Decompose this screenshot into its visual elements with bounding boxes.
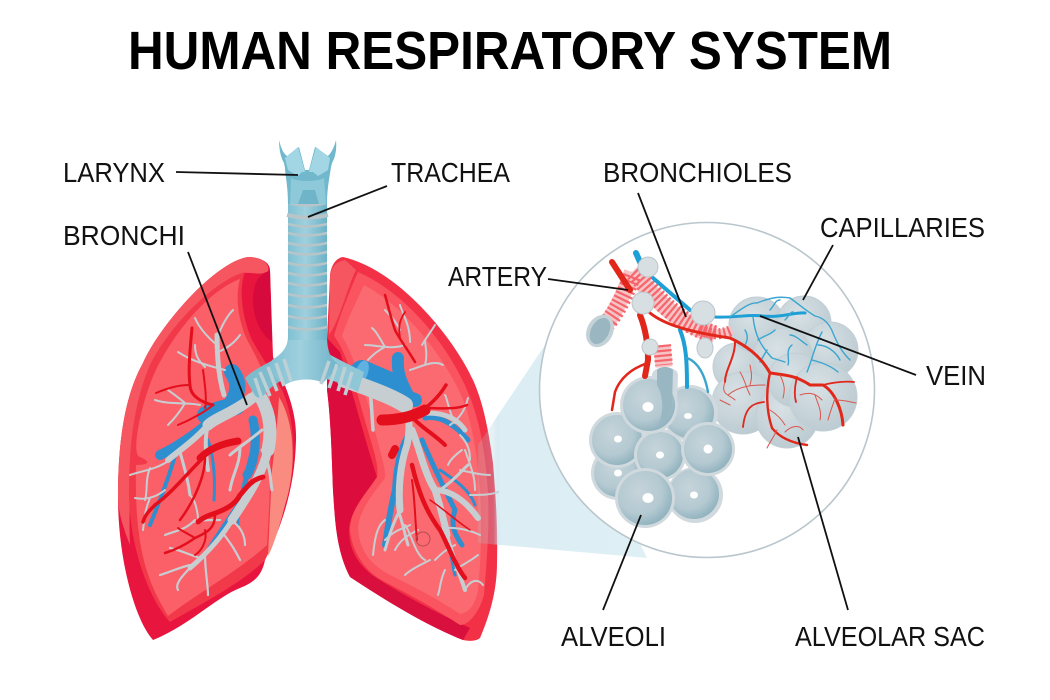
alveolus — [589, 412, 645, 468]
label: artery — [448, 261, 628, 292]
grey airways right — [345, 305, 498, 595]
alveolus — [634, 429, 686, 481]
bronchiole open end — [581, 310, 619, 352]
larynx — [279, 140, 336, 204]
alveolus — [662, 385, 718, 441]
trachea and larynx — [245, 140, 364, 399]
artery — [612, 262, 854, 445]
label: alveolar sac — [795, 437, 985, 652]
arteries right — [382, 295, 470, 578]
alveolus — [667, 467, 723, 523]
label: bronchioles — [603, 157, 792, 317]
vein capillaries — [687, 297, 850, 392]
alveolus — [615, 468, 675, 528]
label: larynx — [63, 157, 298, 188]
bronchial tree left lung — [130, 310, 272, 595]
zoom beam — [478, 345, 647, 558]
label: artery: ARTERY — [448, 261, 547, 292]
label: alveoli — [561, 515, 666, 652]
label: trachea — [308, 157, 510, 217]
blood vessels in zoom — [612, 253, 856, 448]
windpipe — [288, 195, 327, 340]
junction nodes — [632, 257, 715, 358]
alveolus — [681, 422, 735, 476]
left lung — [118, 257, 296, 640]
label: vein: VEIN — [926, 360, 986, 391]
bronchiole lumen — [585, 314, 615, 348]
pulmonary vessel blue right — [362, 358, 475, 575]
label: larynx: LARYNX — [63, 157, 165, 188]
cartilage rings — [287, 203, 328, 330]
label: alveolar sac: ALVEOLAR SAC — [795, 621, 985, 652]
small nodule — [416, 532, 430, 546]
grey airways left — [130, 310, 272, 595]
bronchus left — [245, 350, 303, 398]
bronchus right — [316, 350, 364, 392]
alveolus with stem — [620, 367, 678, 434]
bronchiole base — [600, 272, 732, 367]
alveoli cluster — [589, 367, 735, 528]
right lung — [327, 257, 497, 641]
alveolar sac — [712, 296, 858, 448]
label: capillaries — [803, 212, 985, 300]
label: bronchi — [63, 220, 247, 405]
pulmonary vessel blue left — [150, 372, 255, 548]
left bronchus rings — [255, 359, 291, 399]
alveolus — [591, 446, 645, 500]
label: capillaries: CAPILLARIES — [820, 212, 985, 243]
vein — [636, 253, 805, 387]
blue tube end — [353, 359, 371, 385]
capillary mesh — [603, 272, 732, 365]
label: trachea: TRACHEA — [391, 157, 510, 188]
label: bronchioles: BRONCHIOLES — [603, 157, 792, 188]
trachea fork — [268, 335, 340, 385]
bronchial tree right lung — [345, 295, 498, 595]
label: vein — [760, 316, 986, 391]
magnifier circle — [540, 222, 874, 558]
label: bronchi: BRONCHI — [63, 220, 185, 251]
label: alveoli: ALVEOLI — [561, 621, 666, 652]
bronchioles with capillary mesh — [581, 272, 732, 367]
artery capillaries — [720, 365, 856, 448]
arteries left — [143, 328, 263, 555]
right bronchus rings — [321, 361, 352, 395]
title: HUMAN RESPIRATORY SYSTEM — [128, 21, 892, 81]
